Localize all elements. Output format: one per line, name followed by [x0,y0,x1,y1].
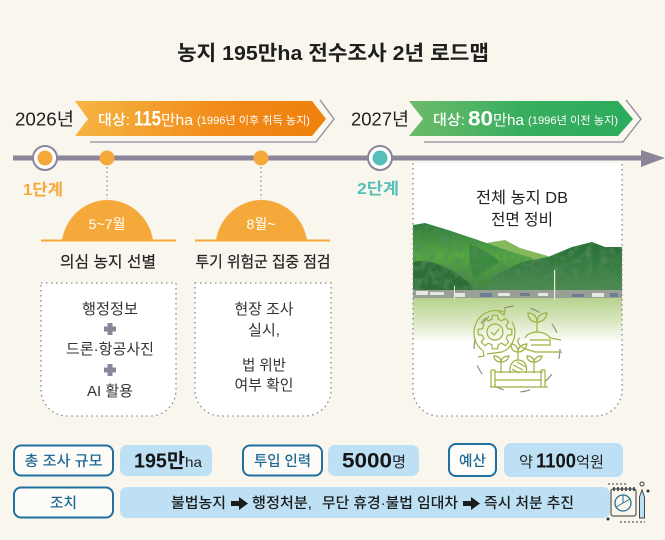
panel: screening methods [41,283,176,416]
panel: screening methods: 행정정보 [82,301,138,318]
label: budget [449,444,496,476]
value: 5000 people [328,445,419,476]
bar: measures description: 행정처분, [252,495,312,512]
panel: inspection actions: 여부 확인 [234,377,294,394]
value: about 110 billion won: 억원 [576,454,604,471]
panel: inspection actions: 법 위반 [242,357,286,374]
panel heading: full farmland database overhaul: 전면 정비 [491,211,553,229]
value: 5000 people: 명 [392,454,406,471]
heading: focused inspection: 투기 위험군 집중 점검 [196,253,330,271]
year label: 2027: 2027년 [351,110,409,130]
bar: measures description: 불법농지 [171,495,226,512]
photo: mountains and farmland [413,223,622,343]
stage 1 marker: 1단계 [23,181,63,199]
label: budget: 예산 [459,453,486,470]
value: 1.95 million ha: ha [185,454,202,470]
label: personnel: 투입 인력 [254,453,311,470]
period: from August [195,150,330,242]
banner: 2026 target: 115 [134,108,161,130]
heading: suspicious farmland screening: 의심 농지 선별 [60,253,156,271]
value: 1.95 million ha: 195만 [134,450,185,472]
dotted border [413,163,622,416]
banner: 2027 target [409,100,641,142]
title: 농지 195만ha 전수조사 2년 로드맵 [177,42,489,65]
panel: inspection actions: 현장 조사 [234,301,294,318]
label: total survey scale: 총 조사 규모 [24,453,102,470]
value: 5000 people: 5000 [342,450,392,472]
label: measures: 조치 [50,495,77,512]
label: total survey scale [14,446,113,476]
bar: measures description: 무단 휴경·불법 임대차 [322,495,458,512]
icon: notebook with pie chart and pencil [607,482,649,522]
banner: 2027 target: 만ha [493,112,525,129]
value: about 110 billion won: 약 [519,454,533,471]
bar: measures description: 즉시 처분 추진 [484,495,574,512]
banner: 2027 target: (1996년 이전 농지) [528,114,618,127]
label: measures [14,488,113,518]
period: May to July [41,150,176,242]
stage 2 marker [357,146,399,198]
banner: 2026 target [75,100,334,142]
period: from August: 8월~ [246,216,276,232]
panel heading: full farmland database overhaul: 전체 농지 DB [476,189,568,207]
value: about 110 billion won [504,443,623,477]
panel heading: full farmland database overhaul [476,189,568,229]
icon: smart farming [474,306,562,392]
banner: 2026 target: (1996년 이후 취득 농지) [197,114,310,127]
bar: measures description [120,487,610,518]
panel: full DB overhaul [413,163,622,416]
stage 1 marker [23,146,63,199]
banner: 2027 target: 80 [468,108,493,130]
stage 2 marker: 2단계 [357,180,399,198]
panel: inspection actions [195,283,331,416]
banner: 2027 target: 대상: [433,112,465,129]
label: personnel [243,446,322,476]
banner: 2026 target: 대상: [98,112,130,129]
banner: 2026 target: 만ha [161,112,194,129]
timeline axis with arrow [13,150,665,167]
year label: 2026: 2026년 [15,110,74,130]
panel: screening methods: 드론·항공사진 [66,341,154,358]
panel: screening methods: AI 활용 [87,383,133,400]
value: 1.95 million ha [120,445,212,476]
value: about 110 billion won: 1100 [536,450,576,472]
period: May to July: 5~7월 [88,216,126,232]
panel: inspection actions: 실시, [248,322,280,339]
